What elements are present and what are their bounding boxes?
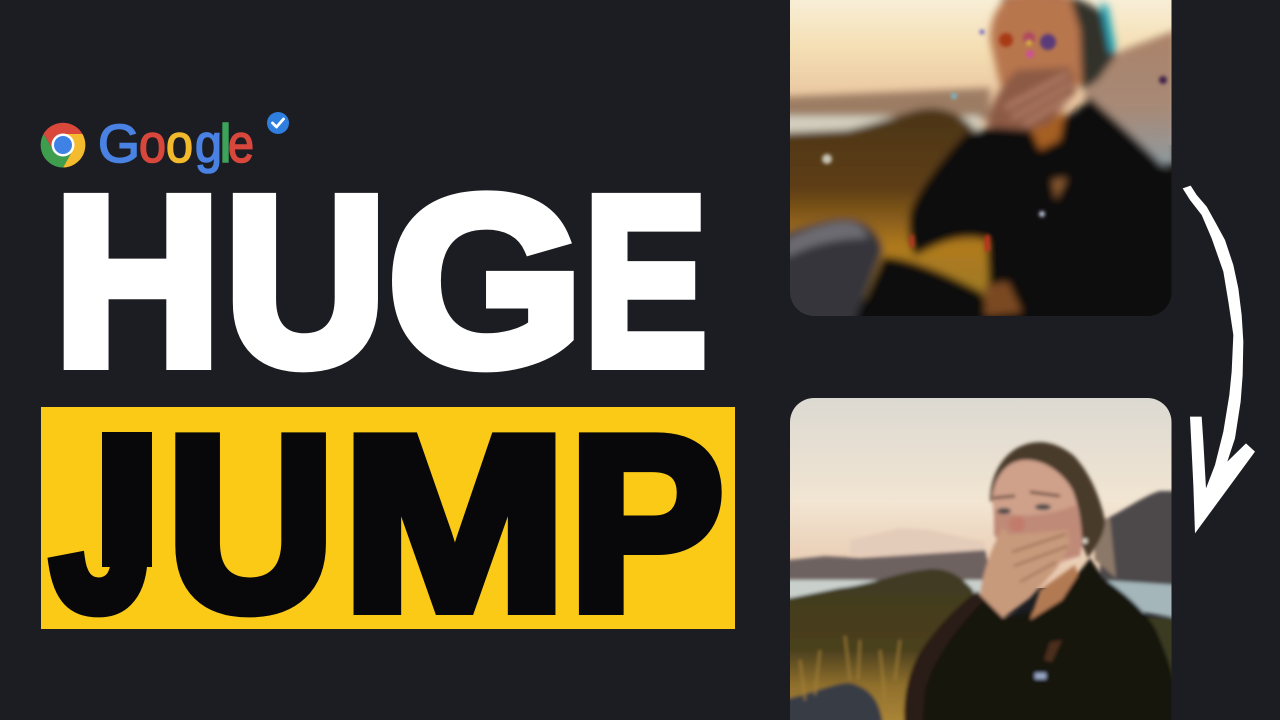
Google wordmark: l [220,114,232,174]
neck [1030,565,1078,620]
nose [1010,516,1024,532]
headline: HUGE: E [584,147,707,415]
brows [993,492,1060,498]
headline: HUGE: U [225,147,386,415]
jacket logo [1035,673,1046,679]
photo: sharp after image of crying woman [780,398,1176,720]
neck [1030,112,1065,150]
hair [1000,0,1116,90]
hill and grass [780,108,1000,300]
headline: HUGE: H [54,147,221,415]
headline: HUGE: G [388,147,583,415]
foreground hill [790,568,976,720]
jacket highlights [1052,178,1067,200]
highlight box with headline: JUMP: M [342,384,567,662]
icon: verified badge [267,112,289,134]
highlight box with headline: JUMP: J [50,384,156,662]
glitch specks over face [822,30,1167,251]
highlight box with headline: JUMP [41,384,735,662]
arrow: hand-drawn white arrow pointing down [1183,186,1255,533]
logo: Google Chrome with wordmark and verified badge [41,112,289,174]
face [992,460,1082,570]
faint far mountain [850,528,985,556]
Google wordmark: e [228,114,254,174]
jacket [909,97,1176,325]
right hillside [1146,615,1172,677]
backpack [780,683,883,720]
Google wordmark: G [98,114,140,174]
knee [853,257,990,325]
Google wordmark: g [195,114,222,174]
highlight box with headline: JUMP: U [167,384,334,662]
eyes [997,508,1011,514]
Google wordmark [98,114,254,174]
headline: HUGE [54,147,707,415]
grass blades [800,636,900,700]
backpack [790,216,888,316]
mountains and water [1085,30,1176,165]
water [780,580,990,598]
icon: Chrome logo [41,123,85,168]
photo: blurred before image of woman [780,0,1176,325]
hand over mouth [980,528,1070,618]
hand over mouth [987,67,1077,130]
wispy hair [1093,518,1116,578]
jacket [904,558,1176,720]
Google wordmark: o [139,114,166,174]
Google wordmark: o [166,114,193,174]
earring [1082,538,1088,544]
highlight box with headline: JUMP: P [569,384,724,662]
mountain band [790,548,990,582]
face [990,0,1082,85]
right mountain [1100,491,1176,585]
hair [990,442,1105,558]
